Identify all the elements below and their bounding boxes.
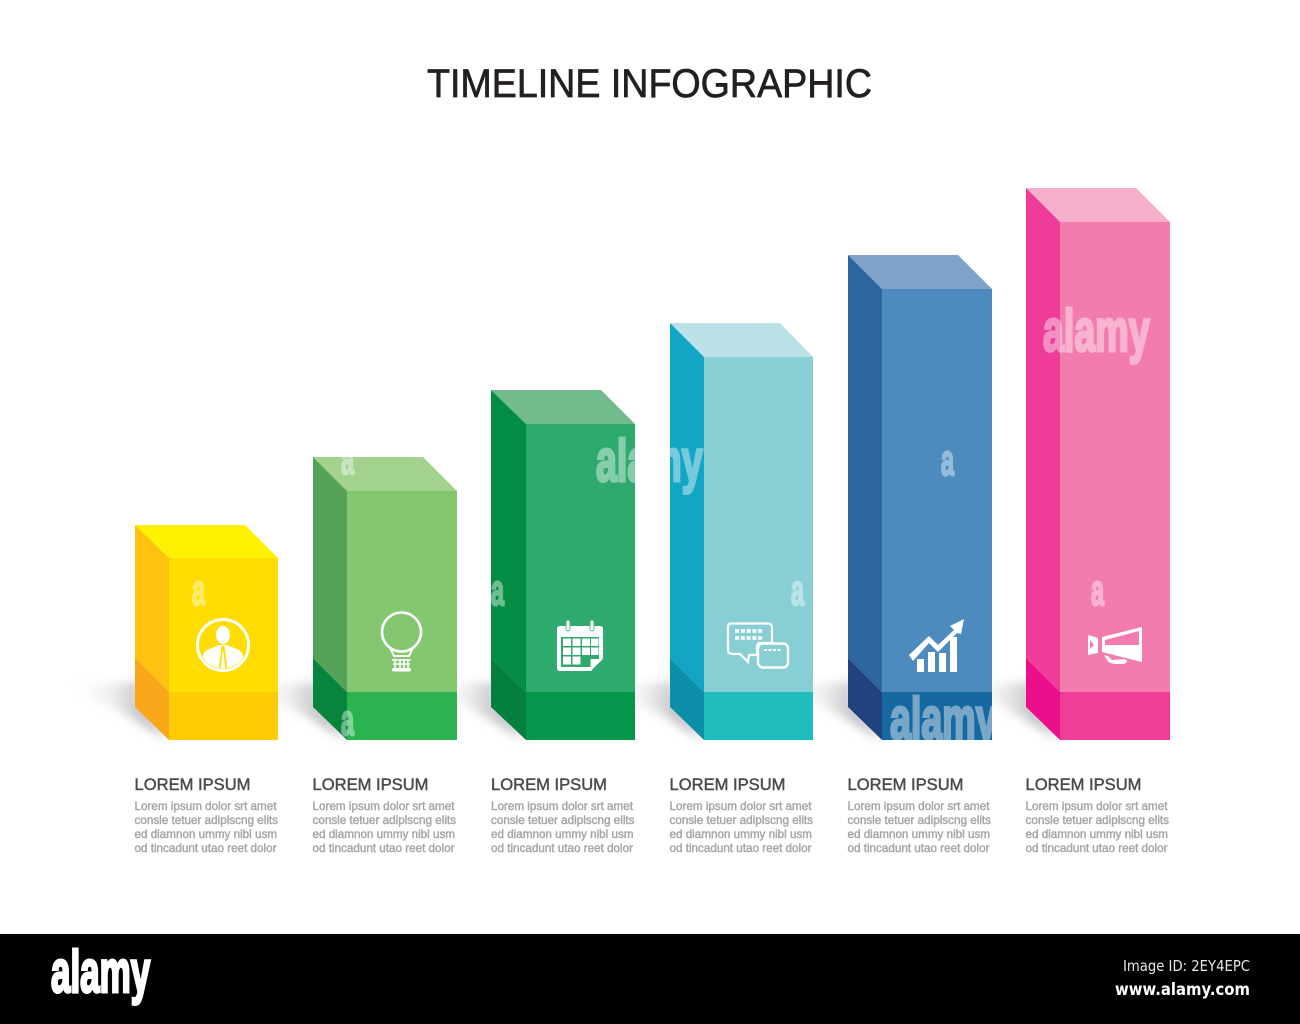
watermark overlays: a: [791, 566, 804, 615]
icon: person in circle: [198, 620, 248, 672]
bar 5: blue: [848, 255, 992, 740]
watermark overlays: alamy: [890, 685, 997, 752]
bar 6: pink: [1026, 188, 1170, 740]
icon: light bulb: [382, 612, 421, 672]
caption 6: LOREM IPSUM: [1026, 776, 1142, 794]
footer logo: alamy: [51, 938, 150, 1005]
watermark overlays: alamy: [1043, 297, 1150, 364]
caption 1: ed diamnon ummy nibl usm: [134, 827, 277, 841]
bar 2: light green: [313, 457, 457, 740]
caption 2: ed diamnon ummy nibl usm: [312, 827, 455, 841]
caption 6: od tincadunt utao reet dolor: [1026, 841, 1168, 855]
watermark overlays: [192, 297, 1150, 752]
caption 3: od tincadunt utao reet dolor: [491, 841, 633, 855]
caption 6: Lorem ipsum dolor srt amet: [1026, 799, 1168, 813]
caption 3: [491, 776, 634, 855]
caption 2: [312, 776, 456, 855]
caption 4: od tincadunt utao reet dolor: [670, 841, 812, 855]
caption 3: LOREM IPSUM: [491, 776, 607, 794]
watermark overlays: a: [192, 566, 205, 615]
caption 3: Lorem ipsum dolor srt amet: [491, 799, 634, 813]
caption 5: od tincadunt utao reet dolor: [848, 841, 990, 855]
icon: calendar: [557, 620, 603, 671]
caption 6: consle tetuer adiplscng elits: [1026, 813, 1169, 827]
caption 1: Lorem ipsum dolor srt amet: [134, 799, 277, 813]
footer url: www.alamy.com: [1115, 980, 1250, 1000]
footer bar: [0, 934, 1300, 1024]
title: TIMELINE INFOGRAPHIC: [427, 62, 872, 106]
caption 5: consle tetuer adiplscng elits: [848, 813, 991, 827]
caption 1: [134, 776, 278, 855]
watermark overlays: alamy: [596, 427, 703, 494]
caption 4: Lorem ipsum dolor srt amet: [670, 799, 812, 813]
bar 3: green: [491, 390, 635, 740]
caption 3: ed diamnon ummy nibl usm: [491, 827, 634, 841]
caption 1: LOREM IPSUM: [134, 776, 250, 794]
caption 5: Lorem ipsum dolor srt amet: [848, 799, 990, 813]
watermark overlays: a: [341, 435, 354, 484]
watermark overlays: a: [1091, 566, 1104, 615]
watermark overlays: a: [941, 436, 954, 485]
caption 5: LOREM IPSUM: [848, 776, 964, 794]
icon: megaphone: [1088, 627, 1142, 664]
caption 6: ed diamnon ummy nibl usm: [1026, 827, 1168, 841]
caption 2: od tincadunt utao reet dolor: [312, 841, 454, 855]
caption 2: LOREM IPSUM: [312, 776, 428, 794]
caption 3: consle tetuer adiplscng elits: [491, 813, 634, 827]
caption 4: consle tetuer adiplscng elits: [670, 813, 813, 827]
watermark overlays: a: [491, 566, 504, 615]
icon: chat bubbles: [728, 624, 788, 668]
caption 1: od tincadunt utao reet dolor: [134, 841, 276, 855]
caption 5: ed diamnon ummy nibl usm: [848, 827, 990, 841]
caption 2: consle tetuer adiplscng elits: [312, 813, 456, 827]
caption 2: Lorem ipsum dolor srt amet: [312, 799, 455, 813]
watermark overlays: a: [341, 696, 354, 745]
floor shadows: [72, 682, 1059, 740]
caption 4: [670, 776, 813, 855]
caption 4: ed diamnon ummy nibl usm: [670, 827, 812, 841]
caption 5: [848, 776, 991, 855]
caption 1: consle tetuer adiplscng elits: [134, 813, 278, 827]
caption 6: [1026, 776, 1169, 855]
bar 4: teal: [670, 323, 813, 740]
icon: growth chart with arrow: [909, 619, 964, 672]
caption 4: LOREM IPSUM: [670, 776, 786, 794]
footer image id: Image ID: 2EY4EPC: [1123, 957, 1250, 975]
bar 1: yellow: [135, 525, 278, 740]
